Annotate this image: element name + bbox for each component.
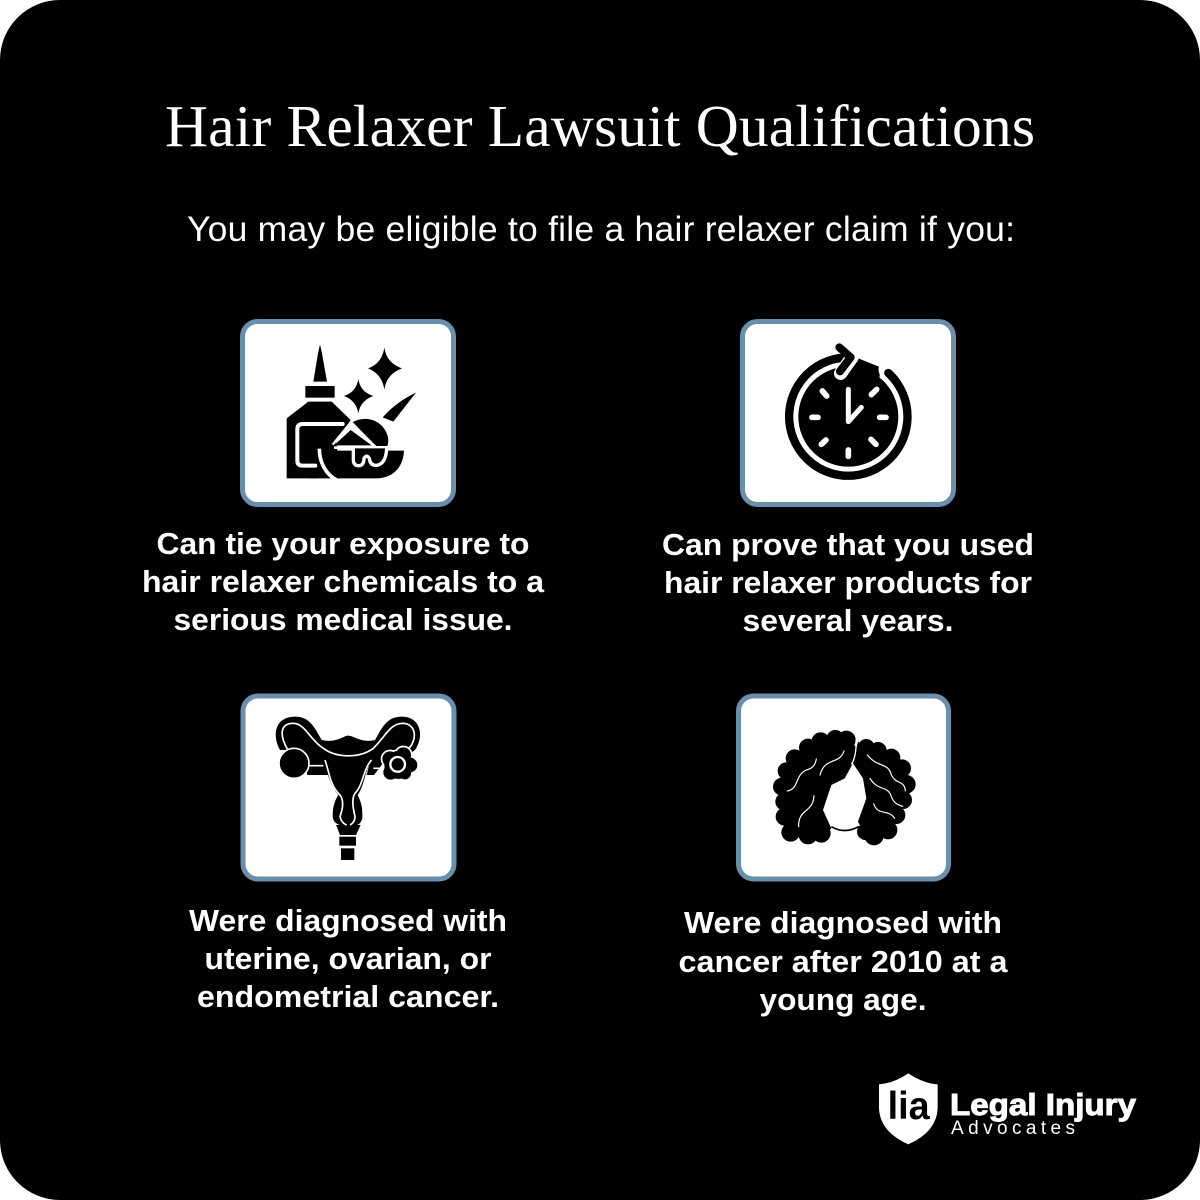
panel: years of use [662, 322, 1034, 638]
icon: shield [879, 1073, 938, 1144]
text: young age: Were diagnosed with [684, 905, 1002, 940]
text: exposure: Can tie your exposure to [156, 526, 530, 561]
icon card: clock [742, 322, 954, 504]
icon card: products [242, 322, 454, 504]
text: diagnosis: uterine, ovarian, or [204, 941, 492, 976]
panel: diagnosis [189, 696, 507, 1014]
text: years [662, 527, 1034, 638]
text: diagnosis [189, 903, 507, 1014]
text: exposure: hair relaxer chemicals to a [142, 564, 545, 599]
title: Hair Relaxer Lawsuit Qualifications [165, 93, 1035, 159]
text: young age: cancer after 2010 at a [678, 944, 1008, 979]
icon card: hair [738, 696, 948, 879]
logo tagline: Advocates [951, 1118, 1075, 1139]
text: diagnosis: Were diagnosed with [189, 903, 507, 938]
text: years: several years. [742, 603, 954, 638]
text: young age [678, 905, 1008, 1017]
panel: exposure to chemicals [142, 322, 545, 637]
text: young age: young age. [760, 982, 926, 1017]
icon card: uterus [243, 696, 454, 879]
icon: shield: lia [888, 1084, 931, 1128]
panel: young age [678, 696, 1008, 1017]
text: exposure [142, 526, 545, 637]
subtitle: You may be eligible to file a hair relaxer claim if you: [187, 209, 1015, 249]
text: years: Can prove that you used [662, 527, 1034, 562]
logo: Legal Injury Advocates [879, 1073, 1137, 1144]
text: years: hair relaxer products for [664, 565, 1032, 600]
text: exposure: serious medical issue. [174, 602, 512, 637]
logo wordmark: Legal Injury [950, 1087, 1137, 1122]
text: diagnosis: endometrial cancer. [197, 979, 499, 1014]
